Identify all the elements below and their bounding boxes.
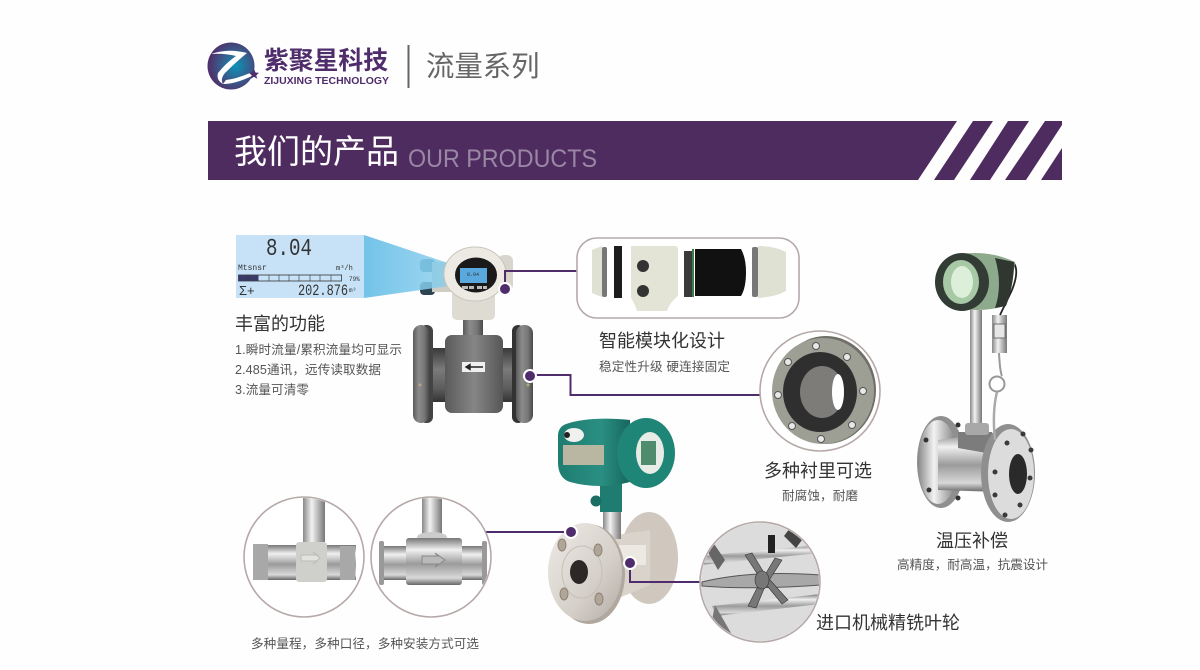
caption: ranges: 多种量程，多种口径，多种安装方式可选	[251, 636, 479, 651]
stem	[970, 310, 982, 428]
panel frame	[577, 238, 799, 318]
vortex flow meter	[917, 253, 1035, 522]
description: 耐腐蚀，耐磨	[782, 489, 858, 503]
total value: 202.876	[298, 282, 348, 300]
heading: 温压补偿	[936, 531, 1008, 551]
banner subtitle: OUR PRODUCTS	[408, 146, 597, 173]
banner background with stripes	[208, 121, 1062, 180]
body	[445, 335, 503, 413]
connector: transmitter to modular panel	[505, 271, 578, 289]
ring	[760, 331, 880, 451]
connector: body to turbine inset	[630, 563, 702, 582]
front flange	[548, 523, 625, 624]
electronics module	[684, 249, 746, 297]
total unit: m³	[349, 287, 356, 294]
divider	[408, 45, 410, 88]
seal ring	[614, 246, 622, 298]
turbine flow meter	[548, 418, 678, 624]
transmitter base	[452, 288, 495, 320]
right cap	[752, 246, 786, 298]
company name: 紫聚星科技	[264, 47, 388, 75]
sensor neck	[603, 511, 621, 539]
percent: 79%	[349, 276, 360, 283]
ring	[371, 497, 491, 617]
neck	[463, 316, 483, 340]
heading: 多种衬里可选	[764, 461, 872, 481]
marker: turbine body	[624, 557, 636, 569]
back pipe	[425, 348, 520, 402]
marker: transmitter	[499, 283, 511, 295]
transmitter head: 8.04	[467, 272, 479, 278]
transmitter head	[444, 247, 506, 301]
inset: lining circle	[760, 331, 880, 451]
banner title: 我们的产品	[234, 133, 399, 170]
display beam	[364, 235, 472, 298]
description: 高精度，耐高温，抗震设计	[897, 557, 1048, 572]
list: 1.瞬时流量/累积流量均可显示	[235, 343, 402, 357]
electromagnetic flow meter	[413, 255, 533, 423]
text: compensation	[897, 531, 1048, 572]
front flange	[981, 424, 1035, 522]
pipe	[938, 432, 1000, 492]
company name english: ZIJUXING TECHNOLOGY	[264, 76, 389, 87]
rear flange	[917, 416, 965, 508]
green housing	[558, 418, 675, 488]
right flange	[512, 325, 533, 423]
back flange	[620, 512, 678, 604]
flow arrow plate	[462, 362, 485, 372]
flange photo	[772, 336, 876, 444]
list item 3: 3.流量可清零	[235, 383, 309, 397]
text: rich functions	[235, 314, 402, 397]
cable glands	[420, 259, 452, 295]
progress bar	[238, 275, 342, 281]
list item 2: 2.485通讯，远传读取数据	[235, 363, 381, 377]
icon: logo globe	[208, 42, 259, 90]
inset: threaded connection	[244, 490, 364, 617]
block	[958, 432, 992, 454]
heading: 丰富的功能	[235, 314, 325, 334]
panel: modular design	[577, 238, 799, 318]
marker: body	[524, 370, 536, 382]
total symbol: Σ+	[239, 283, 255, 298]
inset: turbine impeller	[700, 522, 820, 642]
label: Mtsnsr	[238, 264, 267, 273]
left flange	[413, 325, 433, 423]
transmitter head	[935, 253, 1015, 311]
pipe	[585, 530, 650, 610]
pressure sensor	[990, 315, 1007, 440]
ring	[700, 522, 820, 642]
LCD readout	[236, 235, 364, 300]
heading: 智能模块化设计	[599, 331, 725, 351]
inset: clamp connection	[371, 490, 491, 617]
text: modular design	[599, 331, 730, 374]
transmitter lugs	[498, 255, 513, 291]
connector: inset circles to flange	[486, 531, 571, 533]
impeller	[700, 522, 820, 642]
ring	[244, 497, 364, 617]
clamp meter	[379, 490, 487, 585]
description: 稳定性升级 硬连接固定	[599, 359, 730, 374]
cable	[1000, 262, 1016, 315]
caption: impeller: 进口机械精铣叶轮	[816, 613, 960, 633]
green stem	[600, 480, 622, 512]
series title: 流量系列	[426, 51, 540, 83]
left cap	[592, 246, 607, 297]
threaded meter	[253, 490, 356, 582]
marker: flange	[565, 526, 577, 538]
unit: m³/h	[336, 265, 353, 273]
housing	[631, 246, 678, 311]
banner	[208, 121, 1062, 180]
text: lining	[764, 461, 872, 503]
LCD background	[236, 235, 364, 298]
connector: body to lining	[530, 375, 760, 395]
logo	[208, 42, 389, 90]
flow rate value: 8.04	[266, 236, 312, 263]
